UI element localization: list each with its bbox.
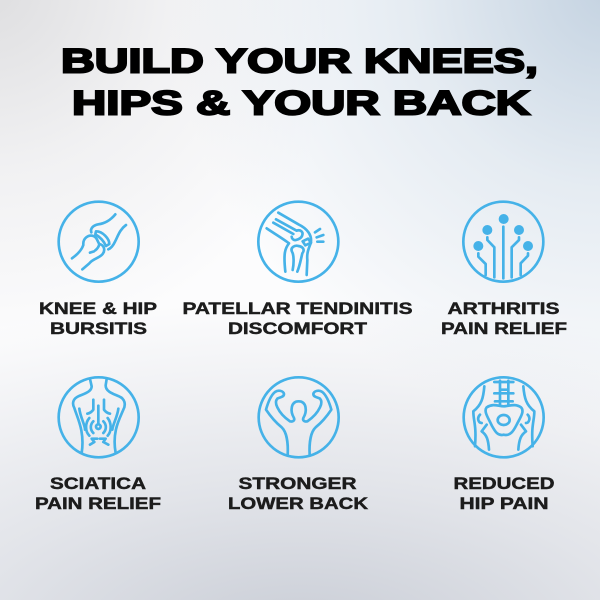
panel: stronger lower back (228, 377, 368, 513)
panel: patellar tendinitis discomfort (182, 202, 413, 338)
label: arthritis pain relief (441, 300, 567, 338)
title: HIPS & YOUR BACK (72, 84, 530, 122)
label: patellar tendinitis discomfort: PATELLAR TENDINITIS (182, 300, 413, 318)
label: reduced hip pain: REDUCED (454, 475, 555, 493)
icon: lower back pain (59, 377, 139, 457)
label: reduced hip pain: HIP PAIN (460, 495, 548, 513)
panel: knee and hip bursitis (39, 202, 157, 338)
label: arthritis pain relief: ARTHRITIS (448, 300, 560, 318)
panel: reduced hip pain (454, 377, 555, 513)
title: BUILD YOUR KNEES, (61, 42, 538, 80)
icon: nerve circuit (463, 202, 543, 282)
panel: sciatica pain relief (35, 377, 161, 513)
label: stronger lower back: LOWER BACK (228, 495, 368, 513)
label: stronger lower back: STRONGER (238, 475, 357, 493)
label: arthritis pain relief: PAIN RELIEF (441, 320, 567, 338)
label: knee and hip bursitis: BURSITIS (50, 320, 147, 338)
label: stronger lower back (228, 475, 368, 513)
label: sciatica pain relief: SCIATICA (50, 475, 146, 493)
label: patellar tendinitis discomfort (182, 300, 413, 338)
label: reduced hip pain (454, 475, 555, 513)
label: patellar tendinitis discomfort: DISCOMFORT (228, 320, 367, 338)
icon: knee joint (59, 202, 139, 282)
icon: flexing figure (259, 377, 339, 457)
label: knee and hip bursitis: KNEE & HIP (39, 300, 157, 318)
label: sciatica pain relief: PAIN RELIEF (35, 495, 161, 513)
panel: arthritis pain relief (441, 202, 567, 338)
title (61, 42, 538, 122)
label: sciatica pain relief (35, 475, 161, 513)
icon: pelvis and spine (464, 377, 544, 457)
label: knee and hip bursitis (39, 300, 157, 338)
icon: bent knee bones (258, 202, 338, 282)
